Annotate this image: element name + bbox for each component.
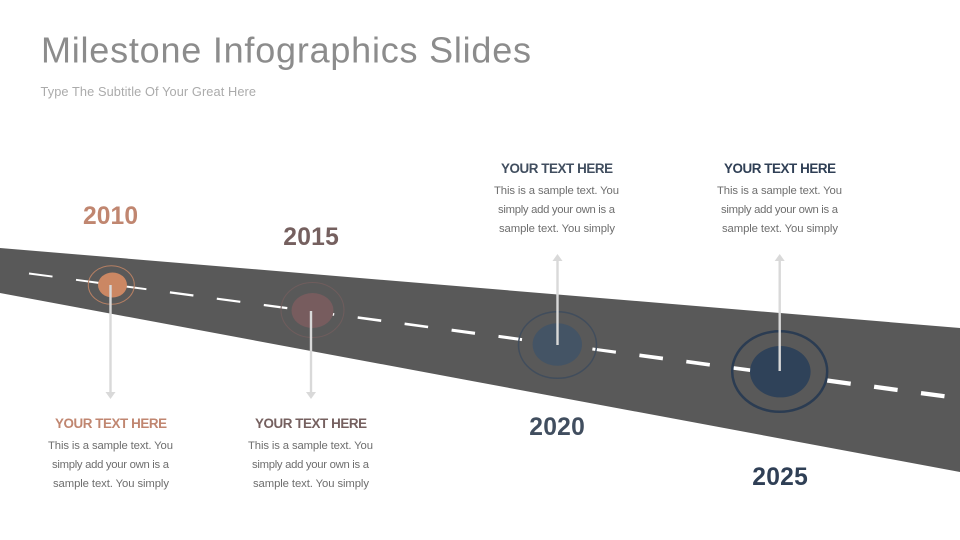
text block: 2025: YOUR TEXT HERE	[724, 161, 836, 176]
text block: 2020	[494, 161, 619, 235]
text block: 2010: YOUR TEXT HERE	[55, 416, 167, 431]
text block: 2025: sample text. You simply	[722, 223, 838, 235]
text block: 2020: simply add your own is a	[498, 204, 616, 216]
text block: 2015: sample text. You simply	[253, 478, 369, 490]
road	[0, 248, 960, 472]
marker: 2015	[281, 282, 344, 338]
subtitle: Type The Subtitle Of Your Great Here	[40, 84, 256, 99]
year: 2020: 2020	[529, 414, 585, 441]
text block: 2010	[48, 416, 173, 490]
text block: 2025: This is a sample text. You	[717, 185, 842, 197]
text block: 2020: YOUR TEXT HERE	[501, 161, 613, 176]
year: 2015: 2015	[283, 224, 339, 251]
text block: 2015: This is a sample text. You	[248, 440, 373, 452]
text block: 2020: sample text. You simply	[499, 223, 615, 235]
text block: 2010: This is a sample text. You	[48, 440, 173, 452]
text block: 2025: simply add your own is a	[721, 204, 839, 216]
text block: 2015: YOUR TEXT HERE	[255, 416, 367, 431]
text block: 2010: sample text. You simply	[53, 478, 169, 490]
marker: 2020	[518, 312, 596, 378]
text block: 2015: simply add your own is a	[252, 459, 370, 471]
arrow: 2025 up	[775, 254, 785, 371]
text block: 2020: This is a sample text. You	[494, 185, 619, 197]
marker: 2025	[732, 331, 827, 412]
arrow: 2020 up	[552, 254, 562, 345]
title: Milestone Infographics Slides	[41, 30, 531, 70]
text block: 2025	[717, 161, 842, 235]
text block: 2010: simply add your own is a	[52, 459, 170, 471]
year: 2025: 2025	[752, 464, 808, 491]
text block: 2015	[248, 416, 373, 490]
marker: 2010	[88, 266, 134, 304]
arrow: 2015 down	[306, 311, 316, 399]
arrow: 2010 down	[106, 285, 116, 399]
year: 2010: 2010	[83, 203, 138, 230]
